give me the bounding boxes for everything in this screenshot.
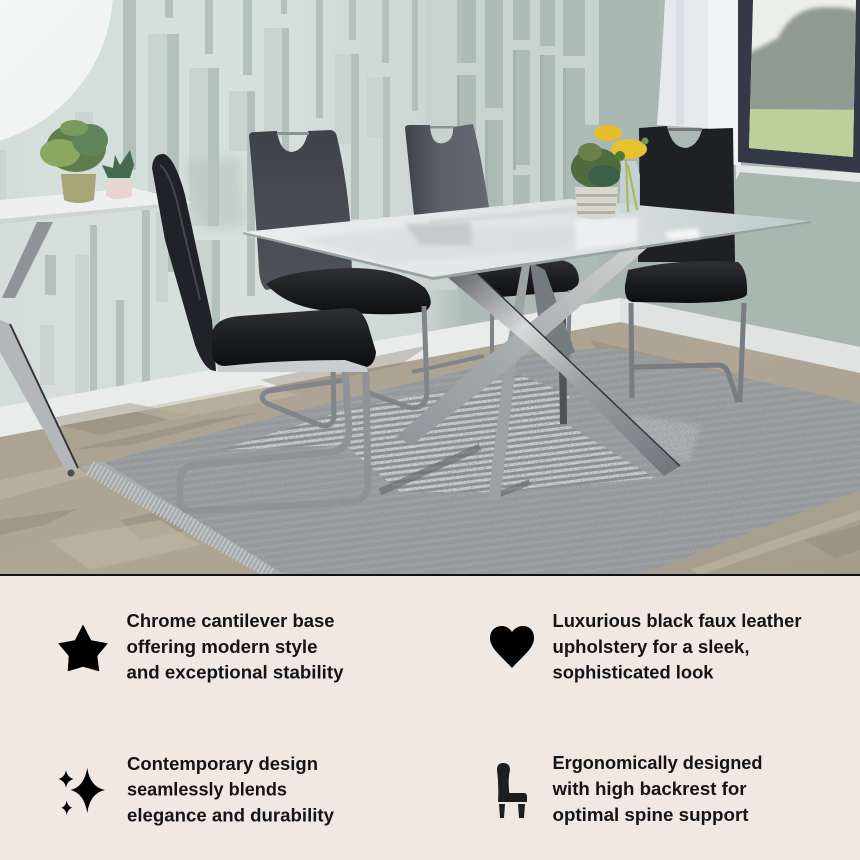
feature: ergonomic — [497, 752, 762, 825]
seat — [266, 268, 431, 314]
wood floor — [0, 322, 860, 575]
main bar — [446, 274, 680, 476]
window — [738, 0, 860, 182]
table base — [396, 248, 680, 500]
chair: back right black — [625, 126, 747, 402]
text block: and exceptional stability — [126, 662, 344, 682]
chrome legs — [412, 290, 570, 372]
foliage — [571, 148, 621, 188]
chair: back left — [249, 130, 431, 426]
console top — [0, 188, 192, 219]
chrome frame — [180, 362, 368, 511]
text block: Chrome cantilever base — [126, 610, 334, 631]
feature: leather — [490, 610, 802, 682]
console table — [0, 188, 192, 476]
cross bar — [396, 248, 647, 445]
text block: optimal spine support — [552, 804, 748, 825]
panel: room photo — [0, 0, 860, 580]
feature: contemporary design — [58, 753, 335, 826]
seat — [625, 261, 747, 303]
console leg — [2, 222, 53, 298]
panel: feature list — [0, 576, 860, 860]
chrome legs — [262, 306, 427, 426]
text block: Contemporary design — [127, 753, 318, 774]
chair shadow on wall — [185, 158, 245, 230]
feature: chrome base — [58, 610, 344, 682]
seat — [447, 260, 579, 297]
text block: sophisticated look — [552, 662, 714, 682]
cast shadows — [380, 447, 530, 495]
decorative wall panels — [0, 0, 599, 394]
centre twist — [530, 262, 575, 360]
backrest — [152, 154, 216, 371]
chair: back middle — [405, 124, 579, 372]
rug sunlit stripes — [220, 375, 655, 492]
leg shadow — [558, 300, 567, 424]
seat — [212, 308, 376, 367]
curtain — [657, 0, 741, 180]
icon: chair — [497, 763, 527, 818]
text block: with high backrest for — [551, 778, 746, 799]
text block: Luxurious black faux leather — [552, 610, 802, 631]
rug — [104, 348, 860, 574]
yellow flowers — [594, 125, 622, 141]
striped pot — [575, 187, 618, 219]
icon: star — [58, 625, 108, 671]
rug fringe — [80, 460, 290, 575]
icon: heart — [490, 626, 534, 668]
text block — [552, 610, 802, 682]
text block: Ergonomically designed — [552, 752, 762, 773]
text block — [551, 752, 762, 825]
chrome legs — [631, 303, 744, 402]
console plant — [40, 120, 134, 203]
mirror — [0, 0, 113, 147]
divider line — [0, 574, 860, 576]
text block: offering modern style — [126, 636, 318, 657]
centerpiece — [571, 125, 648, 219]
wall — [0, 0, 860, 440]
glass vase — [619, 161, 640, 214]
small succulent — [106, 180, 132, 199]
table top — [243, 199, 811, 280]
text block — [127, 753, 335, 826]
baseboard — [0, 298, 860, 437]
text block — [126, 610, 344, 682]
chair: front — [152, 154, 376, 511]
text block: seamlessly blends — [127, 779, 287, 800]
rear leg — [488, 265, 530, 500]
text block: upholstery for a sleek, — [552, 636, 750, 657]
icon: sparkles — [58, 768, 105, 815]
text block: elegance and durability — [127, 804, 335, 826]
